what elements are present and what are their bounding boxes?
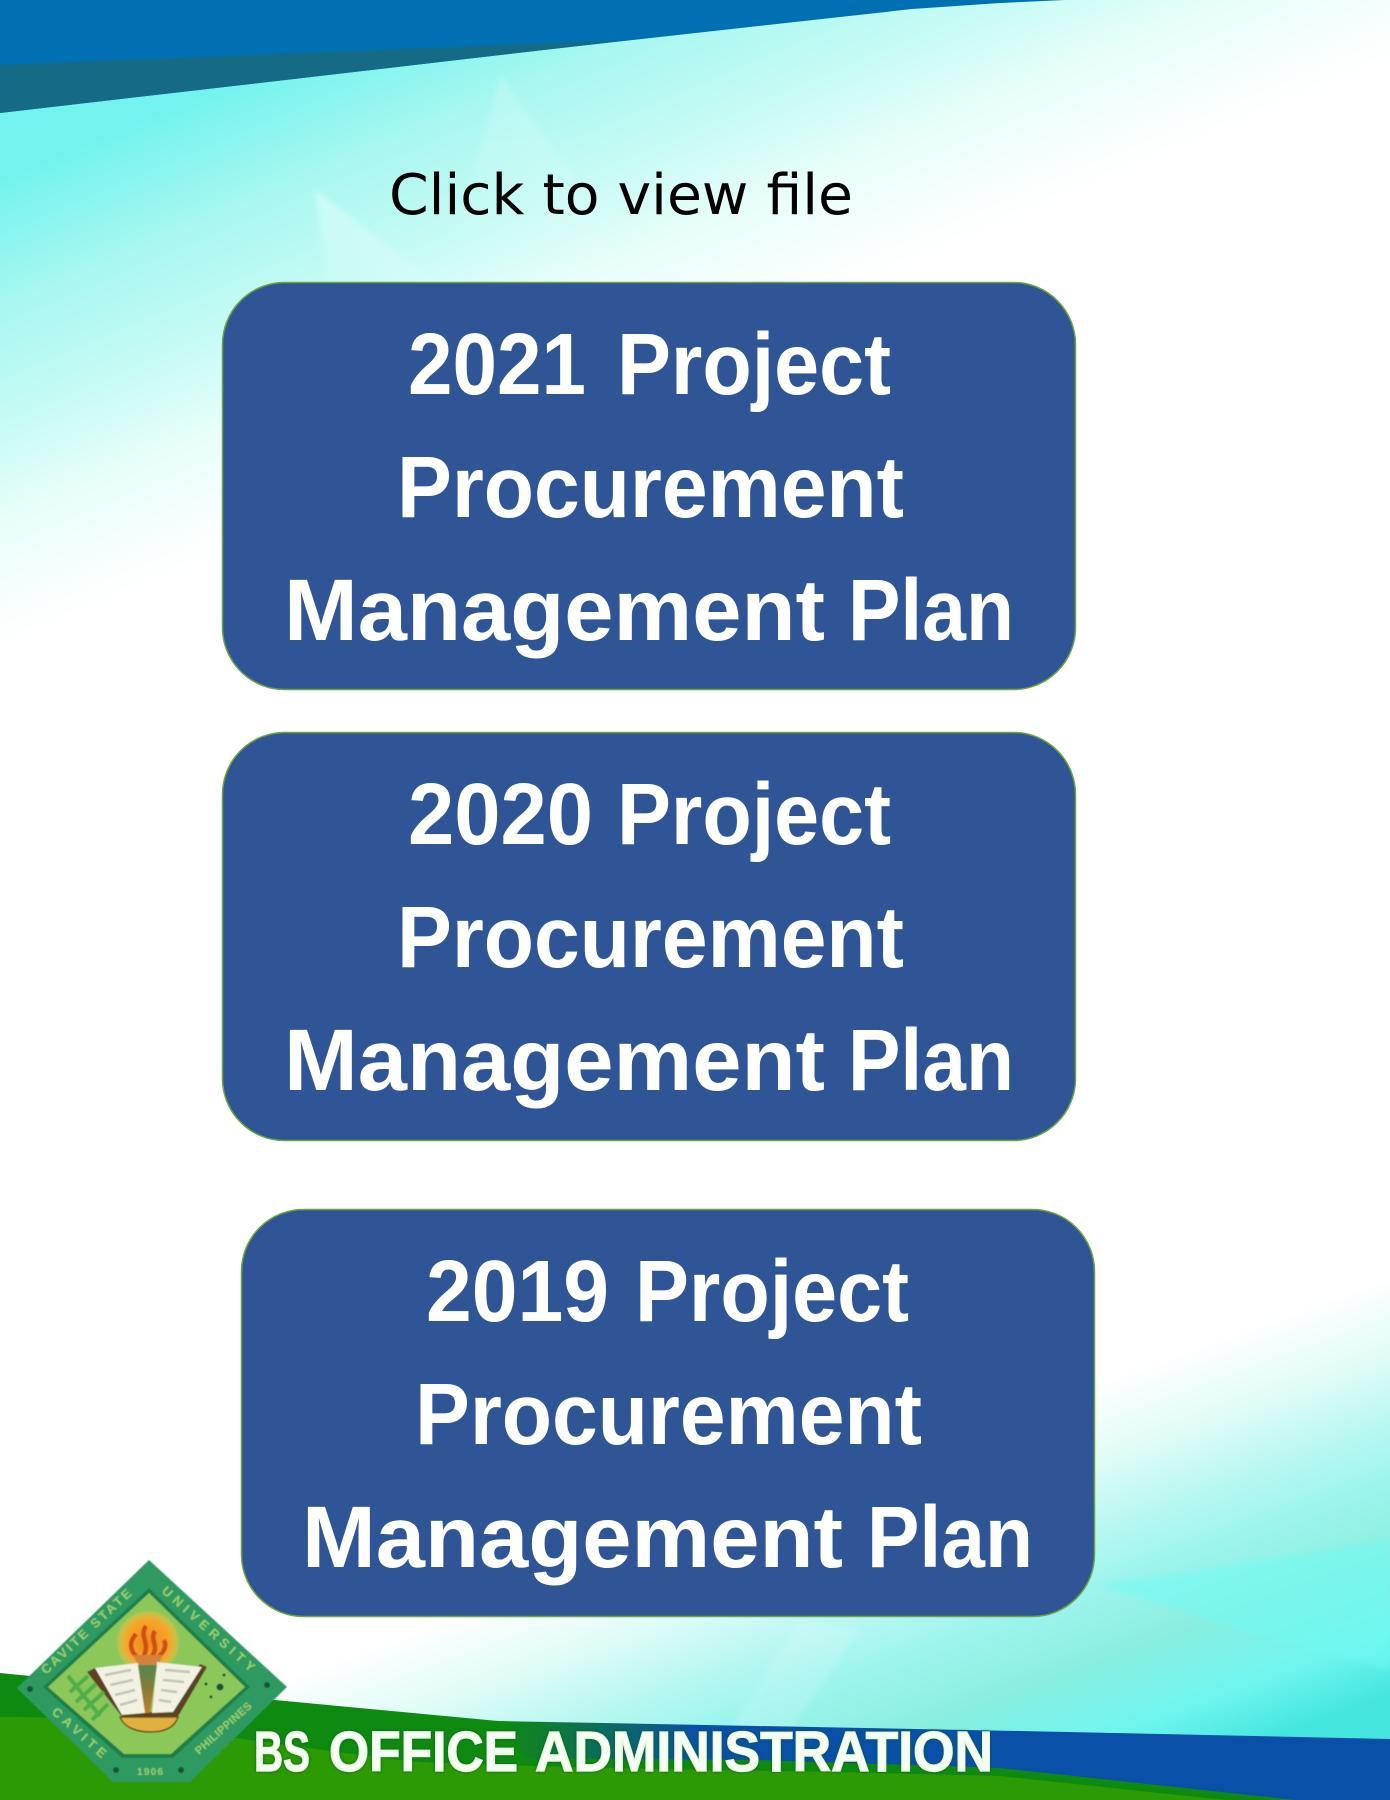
heading: 2021 plan: 2021 bbox=[408, 316, 586, 413]
panel: 2020 plan bbox=[222, 732, 1076, 1140]
gear bbox=[120, 1717, 178, 1732]
heading: 2019 plan: Procurement bbox=[415, 1366, 922, 1463]
heading: 2021 plan: Procurement bbox=[397, 439, 904, 536]
heading: 2021 plan: Plan bbox=[848, 562, 1014, 659]
heading: 2019 plan: Management bbox=[302, 1489, 843, 1586]
footer title: OFFICE bbox=[329, 1720, 518, 1784]
heading: 2019 plan: Project bbox=[635, 1243, 909, 1340]
seal text: PHILIPPINES bbox=[193, 1700, 255, 1757]
heading: 2020 plan: Plan bbox=[848, 1012, 1014, 1109]
footer title: ADMINISTRATION bbox=[535, 1720, 993, 1784]
heading: 2020 plan: Project bbox=[617, 766, 891, 863]
torch flame bbox=[131, 1626, 165, 1656]
heading: 2021 plan: Management bbox=[284, 562, 825, 659]
heading: 2020 plan: 2020 bbox=[408, 766, 593, 863]
torch sun bbox=[117, 1611, 179, 1673]
icon: university seal bbox=[17, 1560, 287, 1782]
footer band bbox=[0, 1673, 1390, 1800]
header band: blue bbox=[0, 0, 1065, 113]
heading: 2019 plan: Plan bbox=[867, 1489, 1033, 1586]
seal text bbox=[38, 1583, 258, 1778]
torch handle bbox=[138, 1665, 157, 1713]
heading: 2021 plan: Project bbox=[617, 316, 891, 413]
rice plant bbox=[68, 1676, 108, 1720]
heading: 2020 plan: Procurement bbox=[397, 889, 904, 986]
open book bbox=[87, 1664, 207, 1718]
panel: 2019 plan bbox=[242, 1210, 1094, 1616]
seal text: CAVITE bbox=[49, 1704, 110, 1761]
seal dots bbox=[27, 1674, 270, 1773]
header band: teal shadow bbox=[0, 40, 630, 113]
heading: 2020 plan bbox=[284, 766, 1014, 1109]
footer title bbox=[254, 1720, 993, 1784]
heading: 2019 plan: 2019 bbox=[426, 1243, 609, 1340]
torch cup bbox=[133, 1655, 163, 1665]
seal text: UNIVERSITY bbox=[159, 1583, 258, 1675]
heading: 2021 plan bbox=[284, 316, 1014, 659]
instruction text: Click to view file bbox=[389, 163, 853, 228]
footer title: BS bbox=[254, 1720, 310, 1784]
heading: 2019 plan bbox=[302, 1243, 1033, 1586]
seal text: 1906 bbox=[137, 1767, 163, 1778]
panel: 2021 plan bbox=[222, 282, 1076, 690]
seal text: CAVITE STATE bbox=[38, 1586, 135, 1677]
heading: 2020 plan: Management bbox=[284, 1012, 825, 1109]
